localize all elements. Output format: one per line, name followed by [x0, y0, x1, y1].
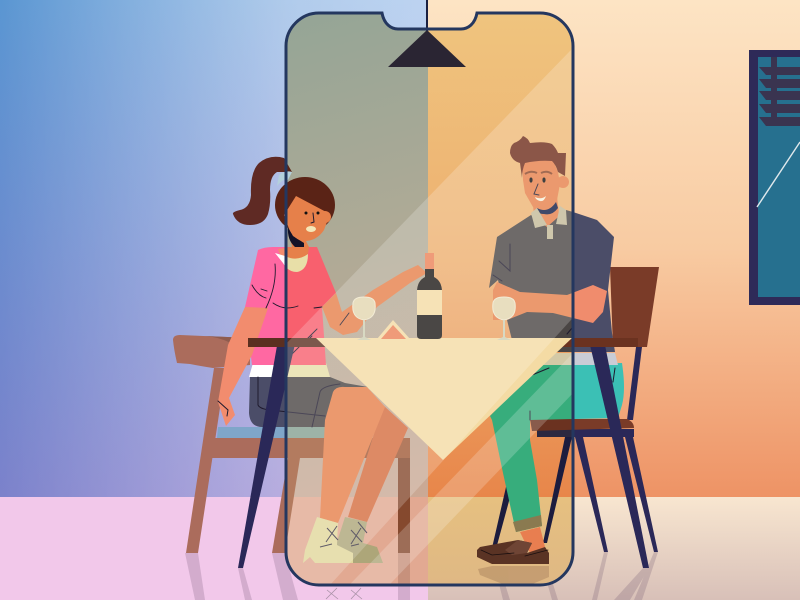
woman's left arm	[218, 307, 268, 426]
man	[477, 136, 624, 564]
waistband	[249, 363, 330, 377]
man's ear	[557, 176, 569, 188]
top folds	[218, 264, 350, 427]
loafer highlight	[505, 540, 532, 555]
placket	[547, 225, 553, 239]
ponytail	[233, 157, 292, 225]
man's face details	[525, 172, 552, 201]
neck shadow	[537, 202, 558, 214]
floor: cream right	[428, 497, 800, 600]
shirt folds	[493, 244, 572, 334]
neck	[278, 232, 309, 272]
woman	[218, 157, 427, 563]
polo collar	[531, 206, 567, 228]
ear	[319, 211, 331, 223]
wine bottle	[417, 253, 442, 339]
trouser detail	[530, 368, 615, 420]
floor reflections	[185, 552, 658, 600]
light beam narrow	[351, 355, 572, 584]
wine glass: woman	[353, 297, 375, 340]
screen floor left	[288, 497, 428, 584]
cuff	[513, 515, 542, 532]
man's face	[522, 158, 560, 208]
neck	[533, 197, 560, 228]
face	[284, 196, 330, 241]
screen tint left	[280, 0, 428, 497]
woman's chair	[173, 335, 410, 553]
wine glass: man	[493, 297, 515, 340]
boot lace reflections	[326, 588, 362, 599]
window	[749, 50, 800, 305]
man's hair	[510, 136, 566, 178]
collar	[275, 253, 308, 272]
table top bar	[248, 338, 638, 347]
shorts	[249, 377, 368, 427]
hair back	[275, 177, 335, 233]
light beam wide	[288, 50, 572, 584]
woman's right arm	[322, 265, 427, 335]
screen floor right	[428, 497, 572, 584]
green trousers	[490, 363, 624, 532]
background: peach right wall	[428, 0, 800, 497]
table legs	[238, 340, 649, 568]
screen reflections	[398, 553, 549, 584]
man's chair	[492, 267, 659, 552]
phone outline	[286, 13, 573, 585]
crossed arms	[493, 282, 607, 323]
grey polo shirt	[489, 210, 615, 352]
hair tie	[277, 171, 292, 186]
loafer	[477, 540, 549, 564]
napkin	[377, 320, 410, 339]
screen tint right	[428, 0, 578, 497]
hanging lamp	[388, 0, 466, 67]
neck shadow	[288, 227, 304, 247]
tablecloth	[316, 338, 572, 460]
woman's face details	[304, 212, 320, 232]
tinted scene inside phone	[288, 136, 572, 564]
woman's legs	[348, 405, 408, 522]
phone screen view	[288, 14, 572, 584]
dining scene: people, chairs and table	[173, 136, 659, 568]
ankle	[520, 527, 545, 553]
boots	[336, 517, 383, 563]
background: blue-purple left wall	[0, 0, 428, 497]
pink top	[245, 247, 336, 365]
floor: pink left	[0, 497, 428, 600]
belt band	[535, 353, 618, 365]
